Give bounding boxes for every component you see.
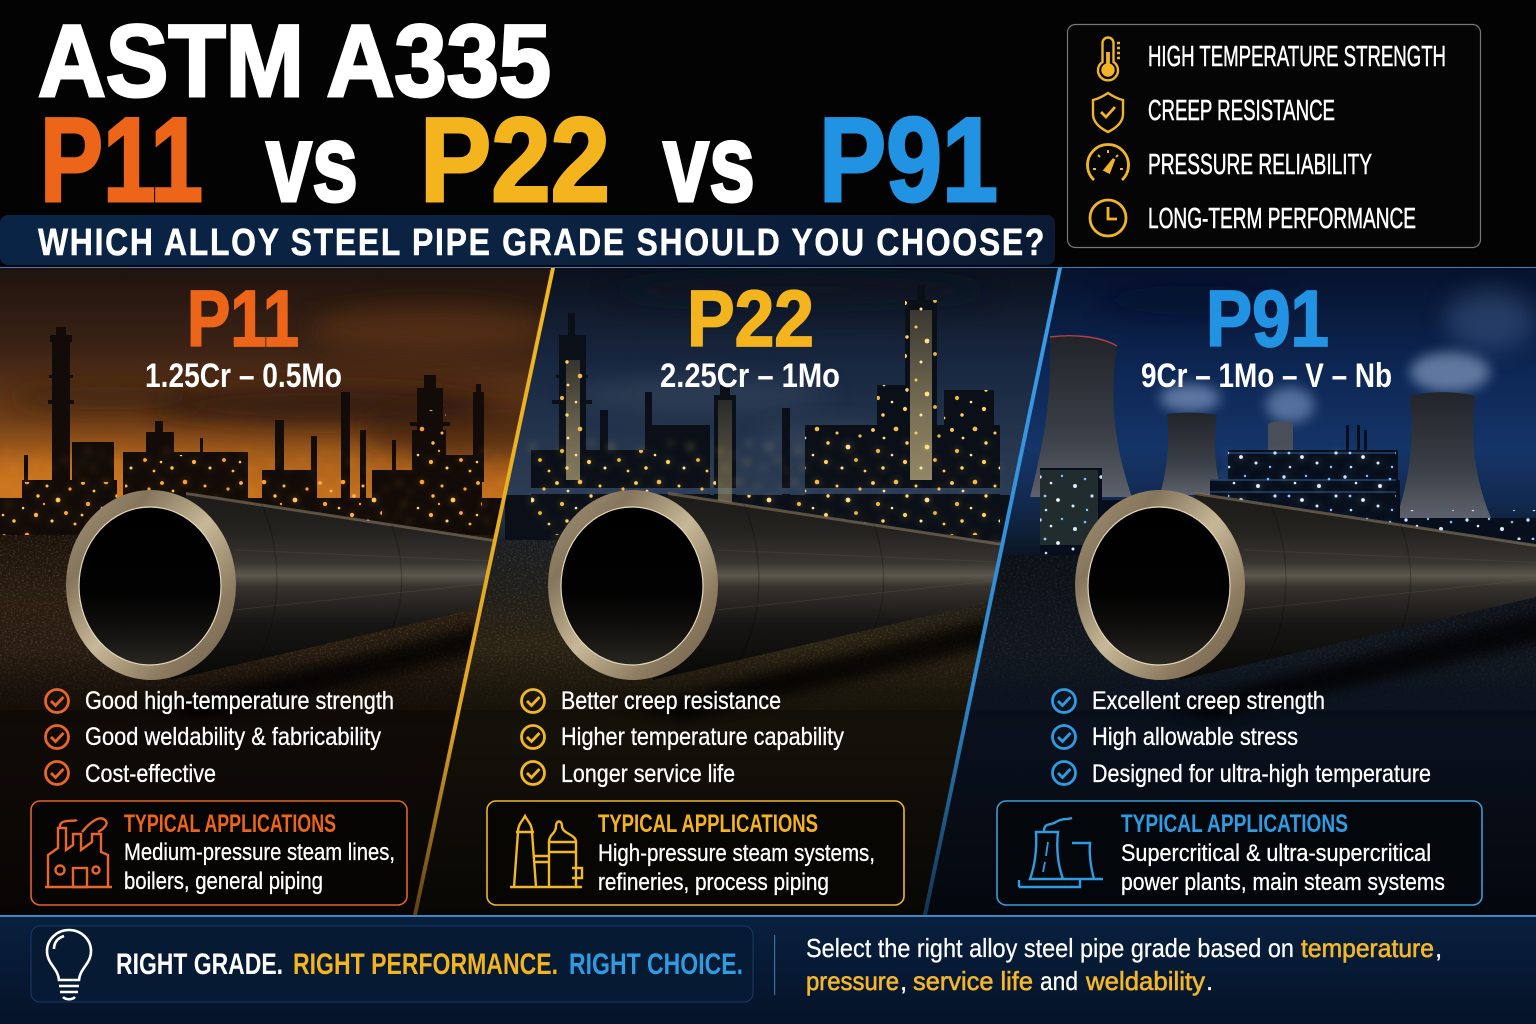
scene: power plant at night bbox=[925, 268, 1536, 915]
check icon bbox=[1052, 762, 1076, 784]
icon: factory bbox=[45, 818, 112, 887]
check icon bbox=[522, 762, 544, 784]
title: P91: P91 bbox=[819, 93, 998, 227]
check icon bbox=[522, 726, 544, 748]
slogan: right performance: RIGHT PERFORMANCE. bbox=[293, 948, 558, 981]
slogan: right choice: RIGHT CHOICE. bbox=[569, 948, 743, 981]
title: P11: P11 bbox=[40, 93, 203, 227]
applications heading: TYPICAL APPLICATIONS bbox=[1121, 810, 1348, 838]
slogan box bbox=[31, 926, 753, 1002]
icon: thermometer bbox=[1098, 38, 1120, 80]
title block bbox=[38, 4, 998, 227]
applications line 2: boilers, general piping bbox=[124, 868, 323, 895]
footer bbox=[0, 915, 1536, 1024]
P22 composition: 2.25Cr – 1Mo bbox=[660, 357, 840, 395]
benefit list bbox=[1052, 687, 1431, 788]
benefit 2: High allowable stress bbox=[1092, 723, 1298, 751]
title: first vs: vs bbox=[266, 102, 358, 225]
scene: refinery at blue dusk bbox=[415, 268, 1065, 915]
icon: shield check bbox=[1093, 93, 1123, 132]
check icon bbox=[46, 690, 68, 712]
benefit 3: Cost-effective bbox=[85, 760, 216, 788]
applications box bbox=[487, 801, 904, 905]
icon: pressure gauge bbox=[1087, 145, 1128, 180]
footer advice text: and bbox=[1040, 966, 1078, 996]
scene: refinery at orange dusk bbox=[0, 268, 551, 838]
label: creep resistance: CREEP RESISTANCE bbox=[1148, 95, 1335, 127]
icon: clock bbox=[1090, 200, 1126, 236]
applications box bbox=[997, 801, 1482, 905]
subtitle text: WHICH ALLOY STEEL PIPE GRADE SHOULD YOU CHOOSE? bbox=[38, 221, 1044, 264]
benefit 3: Designed for ultra-high temperature bbox=[1092, 760, 1431, 788]
check icon bbox=[46, 762, 68, 784]
footer advice text bbox=[774, 933, 1442, 996]
icon: cooling towers bbox=[1019, 818, 1103, 887]
divider: P22 and P91 bbox=[923, 268, 1062, 915]
footer advice text: weldability bbox=[1085, 966, 1205, 996]
footer advice text: temperature bbox=[1301, 933, 1434, 963]
applications heading: TYPICAL APPLICATIONS bbox=[124, 810, 336, 838]
subtitle banner bbox=[0, 215, 1055, 265]
P11 heading: P11 bbox=[187, 274, 299, 363]
benefit 2: Higher temperature capability bbox=[561, 723, 844, 751]
title: P22: P22 bbox=[420, 93, 610, 227]
footer advice text: Select the right alloy steel pipe grade based on bbox=[806, 933, 1294, 963]
benefit 3: Longer service life bbox=[561, 760, 735, 788]
applications line 1: Medium-pressure steam lines, bbox=[124, 839, 395, 866]
applications line 2: refineries, process piping bbox=[598, 869, 829, 896]
slogan: right grade: RIGHT GRADE. bbox=[116, 948, 283, 981]
pipe bbox=[548, 490, 1022, 720]
applications heading: TYPICAL APPLICATIONS bbox=[598, 810, 818, 838]
panel: key properties bbox=[1068, 24, 1480, 248]
P11 composition: 1.25Cr – 0.5Mo bbox=[145, 357, 342, 395]
footer advice text: , bbox=[900, 966, 907, 996]
applications line 1: High-pressure steam systems, bbox=[598, 840, 875, 867]
footer advice text: pressure bbox=[806, 966, 899, 996]
divider: P11 and P22 bbox=[413, 268, 555, 915]
P91 heading: P91 bbox=[1206, 274, 1329, 363]
title: ASTM A335: ASTM A335 bbox=[38, 4, 551, 118]
benefit 2: Good weldability & fabricability bbox=[85, 723, 381, 751]
footer advice text: . bbox=[1206, 966, 1213, 996]
check icon bbox=[1052, 726, 1076, 748]
icon: light bulb bbox=[47, 930, 91, 999]
applications box bbox=[31, 801, 407, 905]
footer advice text: service life bbox=[913, 966, 1033, 996]
panel: P11 bbox=[0, 268, 580, 915]
benefit list bbox=[46, 687, 394, 788]
applications line 2: power plants, main steam systems bbox=[1121, 869, 1445, 896]
applications line 1: Supercritical & ultra-supercritical bbox=[1121, 840, 1431, 867]
P22 heading: P22 bbox=[687, 274, 814, 363]
benefit 1: Better creep resistance bbox=[561, 687, 781, 715]
pipe bbox=[66, 490, 494, 716]
check icon bbox=[1052, 690, 1076, 712]
footer advice text: , bbox=[1435, 933, 1442, 963]
label: pressure reliability: PRESSURE RELIABILITY bbox=[1148, 149, 1372, 181]
top separator bbox=[0, 267, 1536, 268]
pipe bbox=[1075, 490, 1536, 720]
panel: P22 bbox=[415, 268, 1065, 915]
benefit list bbox=[522, 687, 844, 788]
benefit 1: Excellent creep strength bbox=[1092, 687, 1325, 715]
check icon bbox=[46, 726, 68, 748]
icon: refinery columns bbox=[510, 816, 582, 887]
check icon bbox=[522, 690, 544, 712]
title: second vs: vs bbox=[663, 102, 755, 225]
P91 composition: 9Cr – 1Mo – V – Nb bbox=[1141, 357, 1392, 395]
panel: P91 bbox=[925, 268, 1536, 915]
benefit 1: Good high-temperature strength bbox=[85, 687, 394, 715]
